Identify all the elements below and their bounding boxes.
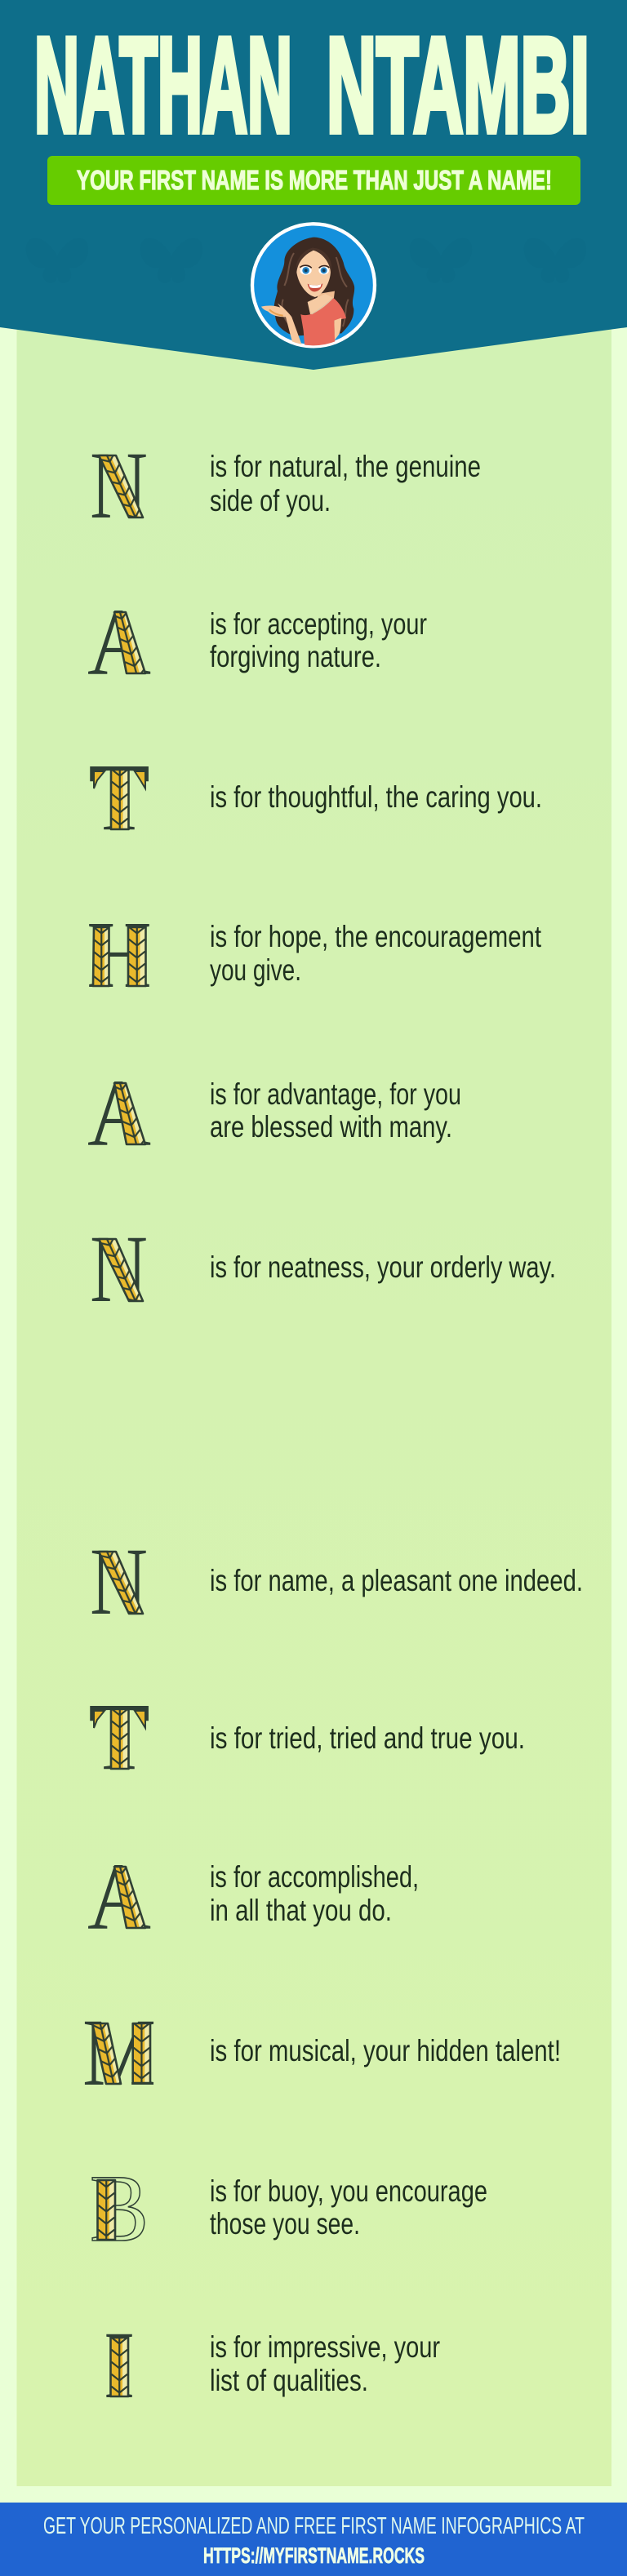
title: NATHAN [34, 10, 292, 160]
letter I: I [103, 2312, 136, 2418]
item: I impressive [103, 2312, 440, 2418]
letter T: T [88, 744, 150, 851]
letter M: M [82, 1999, 156, 2106]
text: impressive: list of qualities. [210, 2364, 368, 2397]
text: thoughtful: is for thoughtful, the caring you. [210, 780, 542, 814]
letter N: N [90, 432, 148, 539]
subtitle banner [47, 156, 580, 205]
text: advantage: are blessed with many. [210, 1110, 452, 1144]
footer url: HTTPS://MYFIRSTNAME.ROCKS [203, 2543, 425, 2568]
text: accomplished: in all that you do. [210, 1894, 392, 1927]
letter T: T [88, 1683, 150, 1790]
text: accepting: is for accepting, your [210, 607, 427, 641]
header banner [0, 0, 627, 370]
footer [0, 2503, 627, 2576]
item: A accepting [87, 588, 427, 695]
item: A advantage [87, 1059, 461, 1166]
text: buoy: is for buoy, you encourage [210, 2174, 487, 2208]
text: hope: is for hope, the encouragement [210, 920, 542, 953]
text: advantage: is for advantage, for you [210, 1077, 461, 1111]
text: hope: you give. [210, 953, 301, 987]
text: tried: is for tried, tried and true you. [210, 1721, 525, 1755]
item: N name [90, 1528, 583, 1635]
letter A: A [87, 1059, 151, 1166]
item: T tried [88, 1683, 525, 1790]
item: N neatness [90, 1215, 556, 1322]
letter H: H [87, 901, 152, 1008]
text: accepting: forgiving nature. [210, 640, 381, 673]
letter A: A [87, 588, 151, 695]
item: A accomplished [87, 1843, 419, 1950]
item: H hope [87, 901, 542, 1008]
icon: avatar of a woman in a circle [252, 224, 375, 349]
text: buoy: those you see. [210, 2207, 360, 2241]
item: B buoy [90, 2155, 487, 2262]
letter N: N [90, 1528, 148, 1635]
letter A: A [87, 1843, 151, 1950]
text: natural: is for natural, the genuine [210, 450, 481, 483]
item: N natural [90, 432, 481, 539]
item: M musical [82, 1999, 561, 2106]
item: T thoughtful [88, 744, 542, 851]
text: impressive: is for impressive, your [210, 2330, 440, 2364]
text: natural: side of you. [210, 484, 331, 517]
letter B: B [90, 2155, 149, 2262]
text: accomplished: is for accomplished, [210, 1860, 419, 1894]
letter N: N [90, 1215, 148, 1322]
